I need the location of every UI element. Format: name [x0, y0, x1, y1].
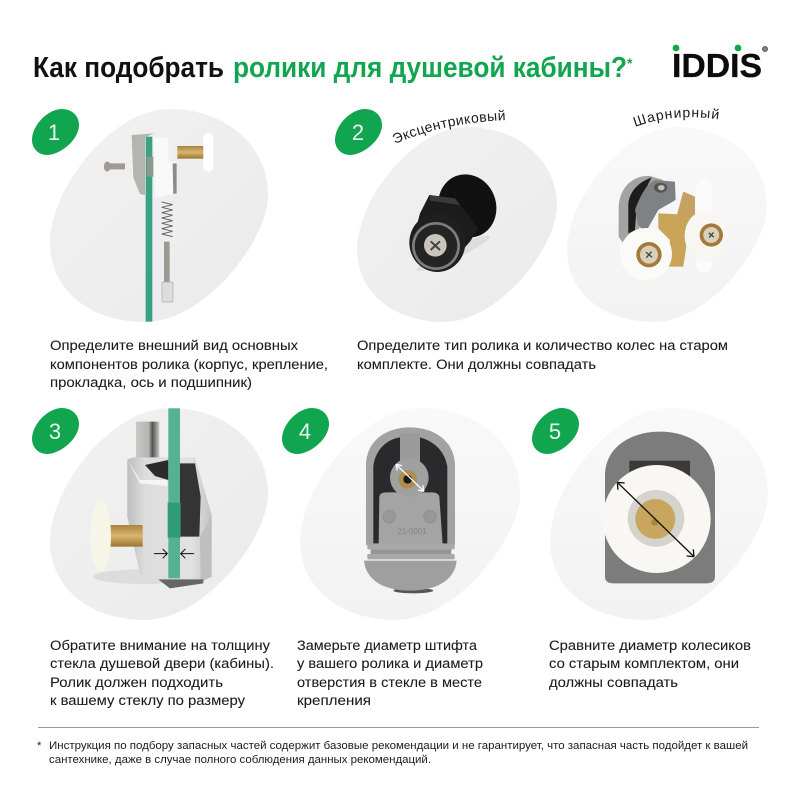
- text block 5: должны совпадать: [549, 675, 678, 691]
- title: Как подобрать: [33, 52, 224, 84]
- text block 4: Замерьте диаметр штифта: [297, 638, 477, 654]
- image blob: wheel diameter: [550, 408, 768, 620]
- badge 2: [335, 109, 382, 155]
- footnote: [37, 740, 748, 766]
- text block 2: Определите тип ролика и количество колес на старом: [357, 338, 728, 354]
- text block 2: комплекте. Они должны совпадать: [357, 357, 596, 373]
- title: ролики для душевой кабины?: [233, 52, 627, 84]
- image blob: roller parts: [50, 109, 268, 322]
- badge 3: 3: [49, 419, 61, 444]
- text block 3: Ролик должен подходить: [50, 675, 223, 691]
- footnote: сантехнике, даже в случае полного соблюдения данных рекомендаций.: [49, 754, 431, 766]
- text block 3: Обратите внимание на толщину: [50, 638, 271, 654]
- text block 5: [549, 638, 751, 691]
- badge 5: 5: [549, 419, 561, 444]
- text block 2: [357, 338, 728, 373]
- text block 4: [297, 638, 483, 709]
- image blob: eccentric roller: [357, 127, 557, 322]
- badge 1: 1: [48, 120, 60, 145]
- panel: step 3: [32, 408, 274, 709]
- badge 4: 4: [299, 419, 311, 444]
- panel: step 4: [282, 408, 520, 709]
- image blob: pin diameter: [300, 408, 520, 620]
- text block 3: стекла душевой двери (кабины).: [50, 656, 274, 672]
- image blob: pin diameter: 21-0001: [397, 527, 427, 536]
- text block 1: Определите внешний вид основных: [50, 338, 298, 354]
- label: hinged: Шарнирный: [633, 108, 719, 126]
- badge 4: [282, 408, 329, 454]
- panel: step 5: [532, 408, 768, 691]
- title: *: [627, 55, 633, 71]
- title: [33, 52, 633, 84]
- label: eccentric: Эксцентриковый: [392, 110, 505, 143]
- logo: IDDIS: IDDIS: [672, 47, 762, 84]
- footnote: Инструкция по подбору запасных частей содержит базовые рекомендации и не гарантирует, что запасная часть подойдет к вашей: [49, 740, 748, 752]
- text block 4: крепления: [297, 693, 371, 709]
- text block 3: к вашему стеклу по размеру: [50, 693, 246, 709]
- text block 3: [50, 638, 274, 709]
- image blob: hinged roller: [567, 127, 767, 322]
- panel: step 2: [335, 108, 766, 373]
- text block 1: прокладка, ось и подшипник): [50, 375, 252, 391]
- text block 5: Сравните диаметр колесиков: [549, 638, 751, 654]
- image blob: glass thickness: [50, 408, 268, 620]
- badge 1: [32, 109, 79, 155]
- text block 4: у вашего ролика и диаметр: [297, 656, 483, 672]
- badge 2: 2: [352, 120, 364, 145]
- text block 1: [50, 338, 328, 391]
- panel: step 1: [32, 109, 328, 391]
- badge 3: [32, 408, 79, 454]
- footnote: *: [37, 740, 42, 752]
- text block 4: отверстия в стекле в месте: [297, 675, 482, 691]
- text block 1: компонентов ролика (корпус, крепление,: [50, 357, 328, 373]
- text block 5: со старым комплектом, они: [549, 656, 739, 672]
- badge 5: [532, 408, 579, 454]
